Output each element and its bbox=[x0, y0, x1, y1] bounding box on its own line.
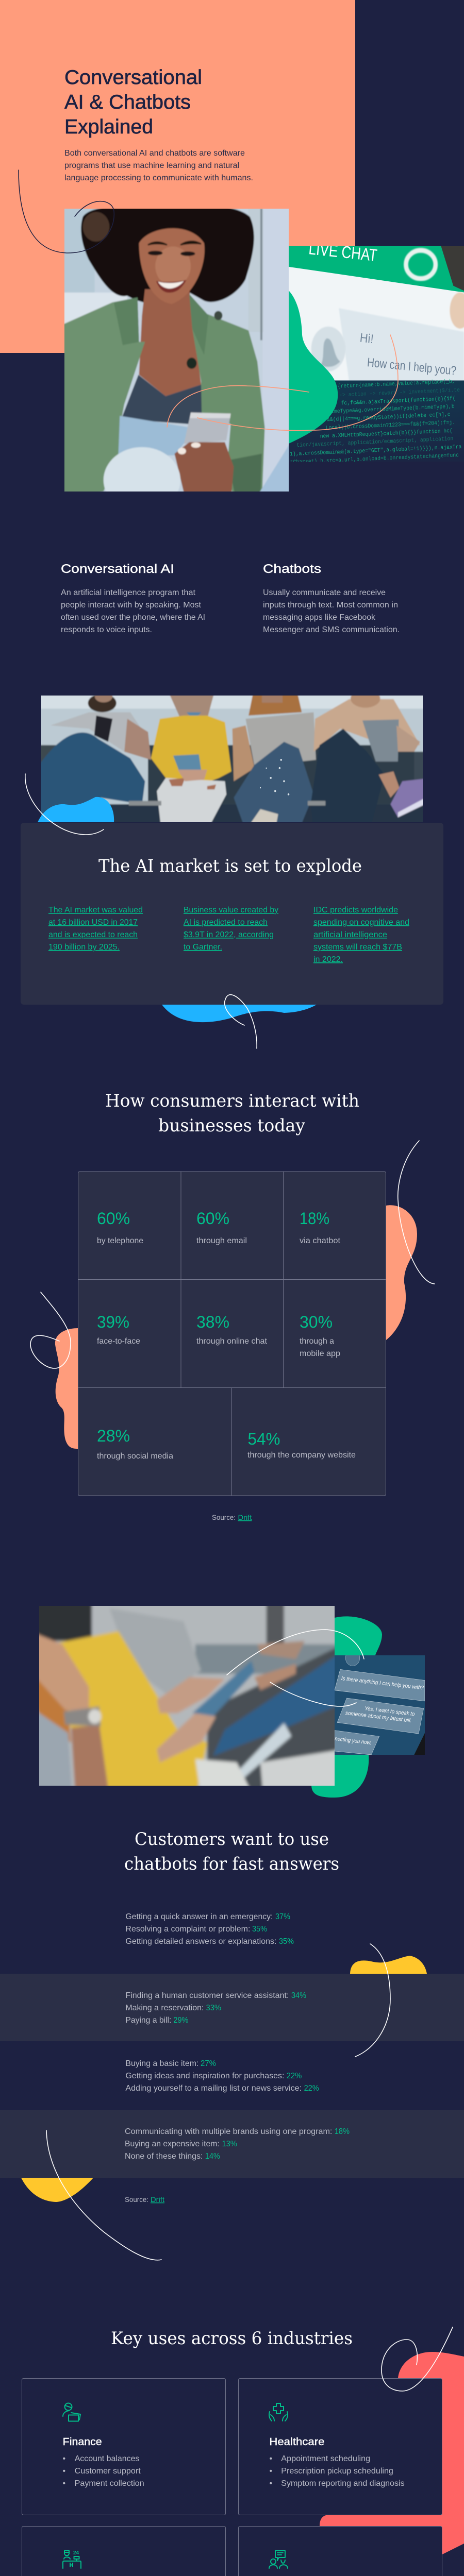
cell: face-to-face: face-to-face bbox=[97, 1337, 140, 1346]
card: finance: Account balances bbox=[75, 2454, 139, 2463]
photo: chat conversation on phone: someone about my latest bill. bbox=[345, 1710, 412, 1724]
cell: mobile app bbox=[300, 1313, 340, 1358]
title: AI & Chatbots bbox=[64, 91, 191, 113]
green blob top bbox=[335, 1616, 382, 1655]
photo: live chat screen and code: LIVE CHAT bbox=[308, 239, 378, 265]
list: fourth group: None of these things: bbox=[125, 2152, 203, 2161]
cell: company website bbox=[247, 1430, 356, 1460]
source: drift: Drift bbox=[238, 1513, 252, 1521]
stats grid bbox=[78, 1172, 386, 1496]
list: third group: Getting ideas and inspiration for purchases: bbox=[125, 2072, 284, 2080]
cell: chatbot bbox=[300, 1209, 341, 1245]
list: top chatbot uses: 35% bbox=[252, 1925, 267, 1934]
panel: chatbots bbox=[263, 562, 400, 634]
panel: conversational AI: responds to voice inputs. bbox=[61, 625, 152, 634]
intro text: Both conversational AI and chatbots are software bbox=[64, 149, 245, 158]
list: fourth group: Communicating with multiple brands using one program: bbox=[125, 2127, 332, 2136]
photo: live chat screen and code: imeType&&g.overrideMimeType(b.mimeType),b bbox=[331, 403, 455, 415]
stat: IDC spending bbox=[313, 906, 409, 964]
card: hospitality bbox=[22, 2527, 226, 2576]
source: drift bbox=[212, 1513, 252, 1521]
stat: market value: 190 billion by 2025. bbox=[48, 943, 120, 952]
list: fourth group: 14% bbox=[205, 2152, 220, 2161]
cell: social media bbox=[97, 1427, 173, 1461]
photo: live chat screen and code: -> action -> reward -> investment)$/i.te bbox=[339, 387, 460, 399]
cell: telephone: by telephone bbox=[97, 1236, 143, 1245]
card: finance bbox=[22, 2378, 226, 2515]
band 2 bbox=[0, 2110, 464, 2178]
list: second group: 34% bbox=[291, 1991, 306, 2000]
card: finance: • bbox=[63, 2467, 65, 2476]
card: human resources bbox=[238, 2527, 442, 2576]
cell: online chat bbox=[196, 1313, 268, 1346]
hero curves: orange bbox=[167, 335, 398, 431]
curve: grid left bbox=[30, 1292, 71, 1368]
cell: face-to-face: 39% bbox=[97, 1313, 129, 1331]
title: Explained bbox=[64, 116, 153, 138]
list: top chatbot uses: Getting a quick answer in an emergency: bbox=[125, 1912, 273, 1921]
yellow blob left bbox=[21, 2178, 93, 2202]
cell: email: 60% bbox=[196, 1209, 229, 1228]
list: second group: Paying a bill: bbox=[125, 2016, 171, 2025]
photo: woman using phone bbox=[64, 209, 289, 492]
intro text: language processing to communicate with humans. bbox=[64, 174, 253, 182]
photo: chat conversation on phone: necting you now. bbox=[335, 1736, 372, 1746]
curve: panel bottom bbox=[225, 995, 257, 1048]
list: fourth group: 13% bbox=[222, 2140, 237, 2148]
heading: how consumers interact: businesses today bbox=[158, 1115, 306, 1136]
cell: company website: 54% bbox=[247, 1430, 280, 1448]
source: drift 2: Drift bbox=[151, 2195, 164, 2204]
list: third group: 22% bbox=[287, 2072, 302, 2080]
list: top chatbot uses: Getting detailed answers or explanations: bbox=[125, 1937, 276, 1946]
hero curve: navy bbox=[19, 170, 114, 253]
heading: how consumers interact bbox=[105, 1091, 359, 1136]
heading: customers want bbox=[124, 1829, 339, 1874]
photo: chat conversation on phone: Yes, I want to speak to bbox=[364, 1706, 415, 1718]
stat: market value: at 16 billion USD in 2017 bbox=[48, 918, 138, 927]
source: drift 2 bbox=[125, 2195, 164, 2204]
list: fourth group: 18% bbox=[335, 2127, 350, 2136]
cell: telephone bbox=[97, 1209, 143, 1245]
card: healthcare bbox=[238, 2378, 442, 2515]
stat: IDC spending: in 2022. bbox=[313, 955, 343, 964]
photo: live chat screen and code: {return{name:b.name,value:a.replace(_b, bbox=[338, 379, 455, 390]
heading: customers want: Customers want to use bbox=[135, 1829, 329, 1850]
curve: grid right bbox=[398, 1141, 435, 1284]
stat: business value: to Gartner. bbox=[184, 943, 222, 952]
red blob top right bbox=[320, 2352, 464, 2554]
cell: company website: through the company website bbox=[247, 1451, 356, 1460]
cell: email: through email bbox=[196, 1236, 247, 1245]
curve: group photo bbox=[25, 774, 104, 835]
icon: finance agent bbox=[63, 2403, 80, 2421]
list: second group: Finding a human customer service assistant: bbox=[125, 1991, 289, 2000]
stat: business value bbox=[184, 906, 278, 952]
stat: business value: $3.9T in 2022, according bbox=[184, 930, 274, 939]
list: fourth group bbox=[125, 2127, 350, 2161]
cell: online chat: through online chat bbox=[196, 1337, 268, 1346]
stat: IDC spending: artificial intelligence bbox=[313, 930, 387, 939]
cell: mobile app: 30% bbox=[300, 1313, 333, 1331]
list: top chatbot uses: Resolving a complaint or problem: bbox=[125, 1925, 250, 1934]
card: healthcare: Symptom reporting and diagnosis bbox=[281, 2479, 405, 2488]
source: drift 2: Source: bbox=[125, 2195, 148, 2204]
photo: chat conversation on phone: Is there anything I can help you with? bbox=[341, 1676, 424, 1691]
stat: market value: and is expected to reach bbox=[48, 930, 138, 939]
photo: live chat screen and code: tCharset),b.src=a.url,b.onload=b.onreadystatechange=func bbox=[290, 452, 459, 466]
panel: conversational AI bbox=[61, 562, 205, 634]
stat: market value: The AI market was valued bbox=[48, 906, 143, 914]
photo: group on couch bbox=[41, 696, 423, 822]
icon: hospitality desk bbox=[63, 2550, 81, 2568]
hero orange panel bbox=[0, 0, 355, 353]
cell: social media: 28% bbox=[97, 1427, 130, 1445]
photo: live chat screen and code: new a.XMLHttpRequest}catch(b){}}function hc( bbox=[320, 428, 453, 440]
heading: how consumers interact: How consumers interact with bbox=[105, 1091, 359, 1111]
intro text: programs that use machine learning and natural bbox=[64, 161, 239, 170]
photo: live chat screen and code: fc,fc&&n.ajaxTransport(function(b){if( bbox=[341, 396, 456, 407]
curves: photo overlay bbox=[227, 1630, 364, 1706]
green blob bottom bbox=[311, 1755, 369, 1798]
photo: live chat screen and code: &&(d||4===g.readyState))if(delete ec[h],c bbox=[327, 412, 451, 423]
panel: conversational AI: Conversational AI bbox=[61, 562, 174, 576]
curve: band 2 bbox=[46, 2130, 161, 2260]
stat: IDC spending: IDC predicts worldwide bbox=[313, 906, 398, 914]
card: finance: Customer support bbox=[75, 2467, 141, 2476]
stat: market value bbox=[48, 906, 143, 952]
panel: chatbots: Usually communicate and receive bbox=[263, 588, 386, 597]
list: second group: 33% bbox=[206, 2004, 221, 2012]
list: third group: Buying a basic item: bbox=[125, 2059, 198, 2068]
list: second group bbox=[125, 1991, 306, 2025]
curve: yellow blob bbox=[355, 1944, 390, 2057]
panel: AI market bbox=[21, 823, 443, 1005]
cell: face-to-face bbox=[97, 1313, 140, 1346]
list: third group: 22% bbox=[304, 2084, 319, 2093]
cell: mobile app: through a bbox=[300, 1337, 334, 1346]
list: third group: Adding yourself to a mailing list or news service: bbox=[125, 2084, 302, 2093]
cell: email bbox=[196, 1209, 247, 1245]
list: fourth group: Buying an expensive item: bbox=[125, 2140, 220, 2148]
blue blob top bbox=[38, 797, 114, 822]
photo: live chat screen and code: 1),a.crossDomain&&(a.type="GET",a.global=!1)}}),n.ajaxTra bbox=[290, 444, 461, 457]
list: third group: 27% bbox=[201, 2059, 216, 2068]
panel: conversational AI: people interact with by speaking. Most bbox=[61, 601, 202, 609]
heading: customers want: chatbots for fast answers bbox=[124, 1854, 339, 1874]
card: healthcare: Prescription pickup scheduling bbox=[281, 2467, 393, 2476]
heading: AI market: The AI market is set to explode bbox=[98, 856, 362, 876]
orange blob right bbox=[386, 1205, 417, 1340]
curve: red blob top bbox=[382, 2327, 453, 2391]
panel: conversational AI: An artificial intelligence program that bbox=[61, 588, 196, 597]
title: Conversational bbox=[64, 66, 202, 89]
card: finance: Payment collection bbox=[75, 2479, 144, 2488]
cell: online chat: 38% bbox=[196, 1313, 229, 1331]
cell: chatbot: via chatbot bbox=[300, 1236, 341, 1245]
card: healthcare: • bbox=[269, 2467, 272, 2476]
cell: mobile app: mobile app bbox=[300, 1349, 340, 1358]
photo: live chat screen and code: tion/javascript, application/ecmascript, application bbox=[296, 436, 453, 449]
source: drift: Source: bbox=[212, 1513, 236, 1521]
photo: people with devices bbox=[39, 1606, 335, 1786]
icon: HR people and chat bbox=[269, 2551, 288, 2568]
panel: chatbots: inputs through text. Most common in bbox=[263, 601, 398, 609]
cell: telephone: 60% bbox=[97, 1209, 130, 1228]
card: finance: • bbox=[63, 2454, 65, 2463]
photo: chat conversation on phone bbox=[335, 1655, 425, 1755]
band 1 bbox=[0, 1974, 464, 2041]
title bbox=[64, 66, 202, 138]
blue blob bottom bbox=[162, 1005, 317, 1022]
cell: chatbot: 18% bbox=[300, 1209, 329, 1228]
intro text bbox=[64, 149, 253, 182]
photo: live chat screen and code bbox=[289, 239, 464, 466]
card: finance: Finance bbox=[63, 2436, 102, 2448]
icon: healthcare hands bbox=[269, 2403, 288, 2421]
card: healthcare: • bbox=[269, 2479, 272, 2488]
card: healthcare: Healthcare bbox=[269, 2436, 324, 2448]
panel: chatbots: Messenger and SMS communication. bbox=[263, 625, 400, 634]
list: second group: Making a reservation: bbox=[125, 2004, 204, 2012]
orange blob left bbox=[55, 1328, 78, 1449]
list: top chatbot uses bbox=[125, 1912, 294, 1946]
list: top chatbot uses: 37% bbox=[275, 1912, 290, 1921]
list: second group: 29% bbox=[173, 2016, 188, 2025]
yellow blob top bbox=[350, 1956, 427, 1974]
stat: IDC spending: systems will reach $77B bbox=[313, 943, 402, 952]
card: healthcare: • bbox=[269, 2454, 272, 2463]
panel: chatbots: Chatbots bbox=[263, 562, 321, 576]
list: top chatbot uses: 35% bbox=[279, 1937, 294, 1946]
panel: chatbots: messaging apps like Facebook bbox=[263, 613, 376, 622]
card: finance: • bbox=[63, 2479, 65, 2488]
green blob bbox=[289, 291, 338, 444]
photo: live chat screen and code: Local||b.crossDomain?1223===f&&(f=204):f=j. bbox=[325, 419, 455, 432]
cell: social media: through social media bbox=[97, 1452, 173, 1461]
photo: live chat screen and code: Hi! bbox=[359, 330, 374, 346]
icon: hospitality desk: 24 bbox=[73, 2550, 79, 2556]
card: healthcare: Appointment scheduling bbox=[281, 2454, 370, 2463]
panel: conversational AI: often used over the phone, where the AI bbox=[61, 613, 205, 622]
stat: business value: AI is predicted to reach bbox=[184, 918, 268, 927]
list: third group bbox=[125, 2059, 319, 2093]
stat: IDC spending: spending on cognitive and bbox=[313, 918, 409, 927]
stat: business value: Business value created by bbox=[184, 906, 278, 914]
heading: key uses: Key uses across 6 industries bbox=[111, 2328, 353, 2349]
